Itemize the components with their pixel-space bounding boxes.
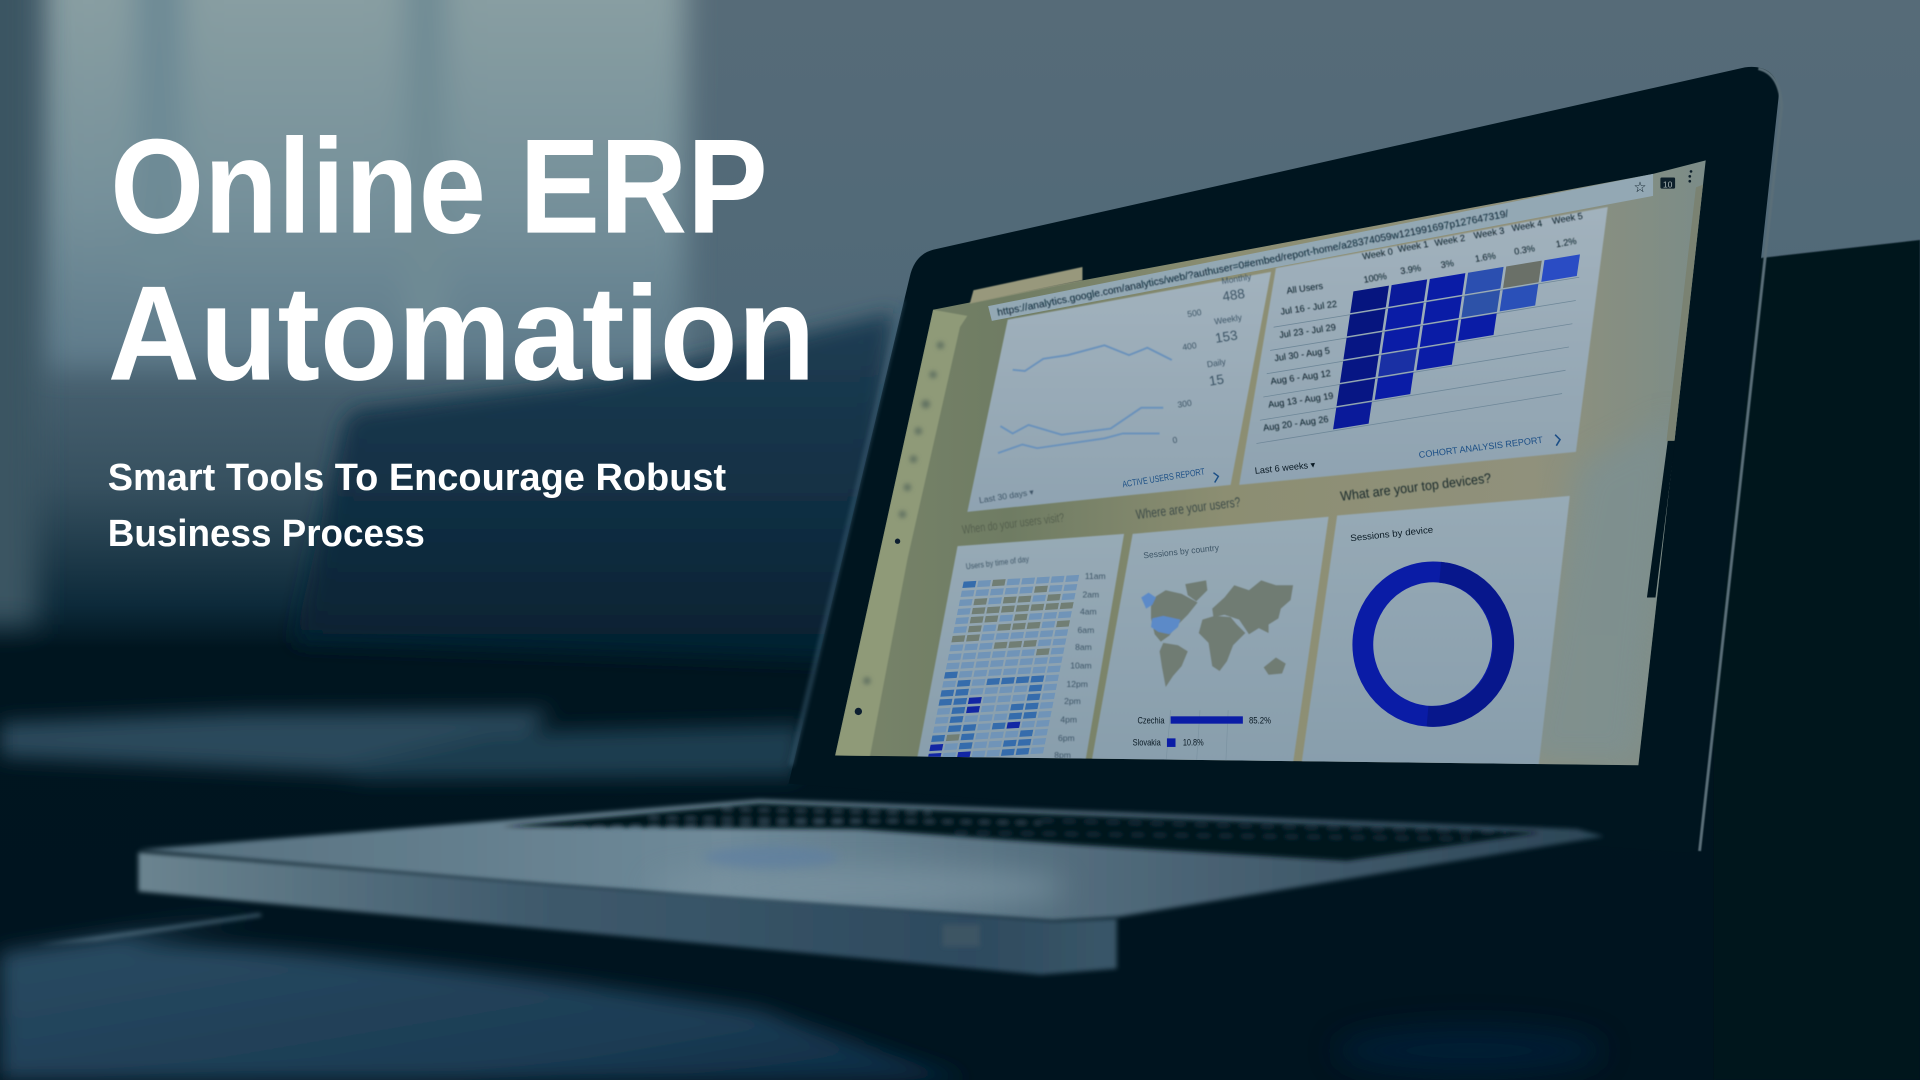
- heatmap title: Users by time of day: [965, 554, 1030, 571]
- active users metrics: [1172, 271, 1253, 445]
- trackpad highlight: [649, 866, 1065, 910]
- cohort headers: 100%: [1363, 271, 1388, 285]
- laptop base top surface: [138, 800, 1604, 921]
- sidebar active icons: [855, 539, 900, 715]
- cohort headers: Week 2: [1434, 233, 1466, 248]
- cohort headers: Aug 20 - Aug 26: [1263, 414, 1329, 433]
- keyboard: [502, 803, 1540, 861]
- browser tab: [970, 267, 1082, 304]
- subtitle: [108, 457, 726, 555]
- cohort headers: [1263, 211, 1583, 433]
- active users metrics: Weekly: [1213, 312, 1243, 326]
- country title: Sessions by country: [1143, 542, 1220, 560]
- cohort headers: Week 5: [1551, 211, 1583, 226]
- active users metrics: 0: [1172, 435, 1178, 445]
- cohort headers: 3%: [1440, 258, 1455, 270]
- cohort headers: 3.9%: [1399, 263, 1422, 276]
- country bars: 85.2%: [1249, 716, 1271, 726]
- heatmap hour labels: 6am: [1078, 625, 1094, 635]
- cohort headers: 1.2%: [1555, 236, 1577, 249]
- active users report link: ACTIVE USERS REPORT: [1122, 466, 1206, 489]
- country bars: 10.8%: [1183, 738, 1204, 748]
- subtitle: Smart Tools To Encourage Robust: [108, 457, 726, 499]
- active users line charts: [998, 345, 1172, 453]
- blurred table left: [0, 710, 803, 779]
- date range: Last 30 days ▾: [978, 487, 1035, 505]
- heatmap hour labels: 2pm: [1064, 696, 1081, 706]
- heatmap hour labels: 11am: [1085, 571, 1106, 581]
- laptop: [138, 67, 1782, 975]
- extension icon: [1660, 178, 1675, 189]
- cohort headers: Aug 6 - Aug 12: [1270, 368, 1331, 386]
- cohort report link: COHORT ANALYSIS REPORT: [1418, 435, 1544, 460]
- heatmap hour labels: 4am: [1080, 607, 1097, 617]
- subtitle: Business Process: [108, 513, 425, 555]
- desk light strip: [37, 913, 262, 945]
- heatmap hour labels: 12pm: [1067, 679, 1088, 689]
- donut chart: [1356, 565, 1511, 723]
- active users metrics: 300: [1177, 398, 1193, 410]
- active users chevron: [1213, 473, 1218, 482]
- panel: sessions by country: [1090, 517, 1329, 771]
- title: Online ERP: [110, 111, 768, 262]
- dark sofa right side: [1714, 240, 1920, 1080]
- heatmap hour labels: 10am: [1070, 661, 1092, 671]
- base port: [943, 924, 980, 947]
- title: Automation: [108, 258, 816, 409]
- heatmap cells: [927, 575, 1079, 760]
- lid silver rim right: [1700, 69, 1782, 851]
- laptop screen: [835, 160, 1706, 771]
- cohort range: Last 6 weeks ▾: [1254, 460, 1316, 476]
- cohort headers: Week 3: [1473, 226, 1505, 241]
- heatmap hour labels: 6pm: [1058, 733, 1075, 743]
- active users metrics: 15: [1208, 372, 1225, 389]
- menu dots: [1688, 170, 1692, 183]
- laptop lid: [789, 67, 1779, 853]
- laptop base front face: [138, 852, 1117, 975]
- active users metrics: 153: [1214, 327, 1239, 346]
- cohort grid: [1256, 254, 1583, 444]
- active users metrics: Daily: [1206, 356, 1227, 369]
- cohort headers: Week 0: [1361, 246, 1394, 262]
- panel: cohort analysis: [1239, 207, 1608, 485]
- blurred window: [43, 0, 686, 367]
- extension icon: 10: [1663, 179, 1673, 189]
- country bars: Czechia: [1138, 716, 1165, 726]
- world map: [1141, 580, 1293, 687]
- device title: Sessions by device: [1350, 525, 1434, 543]
- section headings: What are your top devices?: [1339, 470, 1492, 504]
- star icon: ☆: [1633, 180, 1647, 196]
- active users metrics: 500: [1187, 307, 1202, 319]
- cohort headers: Aug 13 - Aug 19: [1267, 391, 1334, 410]
- cohort headers: Jul 30 - Aug 5: [1274, 345, 1331, 363]
- section headings: When do your users visit?: [961, 510, 1065, 537]
- heatmap hour labels: 8pm: [1054, 750, 1071, 760]
- cohort headers: 0.3%: [1513, 243, 1536, 257]
- cohort headers: 1.6%: [1474, 251, 1496, 264]
- sidebar: [835, 310, 967, 759]
- left wall shade: [0, 0, 37, 624]
- desk surface: [0, 913, 967, 1080]
- cohort headers: Jul 23 - Jul 29: [1278, 322, 1336, 340]
- title: [108, 111, 816, 409]
- section headings: Where are your users?: [1135, 494, 1241, 522]
- heatmap hour labels: 8am: [1075, 642, 1092, 652]
- country bars: Slovakia: [1133, 738, 1162, 748]
- sidebar icons: [863, 342, 944, 684]
- heatmap hour labels: 2am: [1082, 590, 1099, 600]
- panel: active users: [967, 271, 1271, 512]
- panel: sessions by device: [1300, 496, 1570, 771]
- cohort headers: All Users: [1286, 281, 1324, 296]
- lid rim left: [791, 300, 902, 765]
- section headings: [961, 470, 1492, 537]
- heatmap hour labels: [1054, 571, 1106, 760]
- active users metrics: 400: [1182, 340, 1198, 352]
- active users metrics: 488: [1221, 286, 1246, 304]
- cohort chevron: [1555, 435, 1560, 446]
- faint reflection bottom right: [1335, 1026, 1604, 1075]
- url text: https://analytics.google.com/analytics/web/?authuser=0#embed/report-home/a28374059w121991697p127647319/: [996, 209, 1509, 319]
- screen dark notch: [1647, 441, 1675, 598]
- active users metrics: Monthly: [1221, 271, 1253, 286]
- panel: time of day heatmap: [915, 534, 1124, 771]
- trackpad reflection: [704, 846, 839, 868]
- country bars: [1133, 710, 1271, 765]
- cohort headers: Week 4: [1511, 218, 1543, 233]
- cohort headers: Jul 16 - Jul 22: [1280, 299, 1338, 317]
- right scroll strip: [1667, 184, 1706, 441]
- lower right screen tint: [1540, 442, 1669, 765]
- address bar: [988, 174, 1653, 321]
- cohort headers: Week 1: [1397, 239, 1429, 254]
- blurred sofa: [294, 312, 894, 661]
- heatmap hour labels: 4pm: [1060, 714, 1077, 724]
